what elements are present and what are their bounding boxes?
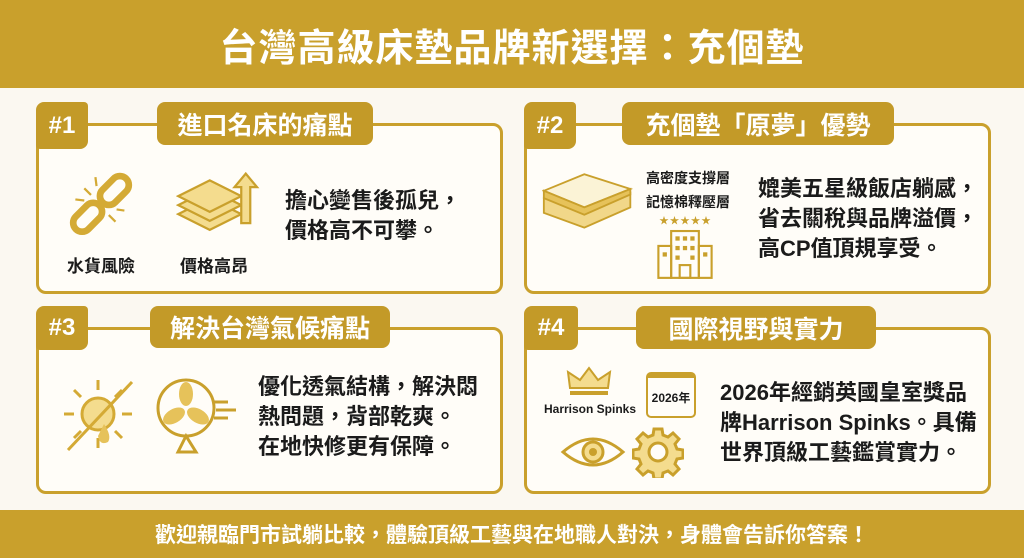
heading 1: 進口名床的痛點 (177, 112, 352, 140)
panel 3 (36, 306, 503, 494)
badge #3: #3 (49, 314, 75, 341)
badge #2 (524, 102, 576, 149)
heading 4 (636, 306, 876, 349)
heading 1 (157, 102, 373, 145)
text 2: 省去關稅與品牌溢價， (758, 206, 978, 231)
panel 2 (524, 102, 991, 294)
labels: layers (646, 170, 730, 210)
icon: fan (156, 378, 236, 454)
badge #4 (524, 306, 578, 350)
footer bar: 歡迎親臨門市試躺比較，體驗頂級工藝與在地職人對決，身體會告訴你答案！ (155, 524, 869, 547)
text 2 (758, 176, 978, 261)
badge #1: #1 (49, 112, 75, 138)
text 4 (720, 380, 977, 465)
title bar: 台灣高級床墊品牌新選擇：充個墊 (219, 28, 804, 70)
text 3: 在地快修更有保障。 (258, 434, 456, 459)
icon: crown with label (544, 366, 636, 416)
heading 4: 國際視野與實力 (668, 316, 844, 344)
text 1: 價格高不可攀。 (285, 218, 439, 243)
text 2: 高CP值頂規享受。 (758, 236, 943, 261)
text 4: 2026年經銷英國皇室獎品 (720, 380, 967, 405)
heading 3: 解決台灣氣候痛點 (170, 315, 370, 343)
icon: eye (560, 438, 626, 466)
icon: broken chain (70, 172, 132, 235)
text 1 (285, 188, 461, 243)
heading 2: 充個墊「原夢」優勢 (645, 112, 870, 140)
footer bar (0, 510, 1024, 558)
label: 價格高昂: 價格高昂 (180, 257, 248, 276)
text 1: 擔心變售後孤兒， (285, 188, 461, 213)
panel 4 (524, 306, 991, 494)
badge #3 (36, 306, 88, 350)
icon: gear (632, 428, 684, 478)
panel 1 (36, 102, 503, 294)
title bar (0, 0, 1024, 88)
heading 3 (150, 306, 390, 348)
labels: layers: 高密度支撐層 (646, 170, 730, 186)
badge #4: #4 (538, 314, 564, 341)
text 3 (258, 374, 478, 459)
icon: calendar 2026: 2026年 (652, 390, 690, 404)
badge #1 (36, 102, 88, 149)
text 3: 熱問題，背部乾爽。 (258, 404, 456, 429)
icon: hotel (657, 214, 713, 279)
icon: sun with drop (64, 380, 133, 451)
text 2: 媲美五星級飯店躺感， (758, 176, 978, 201)
icon: mattress (542, 173, 633, 229)
label: 水貨風險: 水貨風險 (67, 257, 135, 276)
icon: money up (176, 172, 260, 232)
text 4: 世界頂級工藝鑑賞實力。 (720, 440, 962, 465)
icon: crown with label: Harrison Spinks (544, 402, 636, 416)
labels: layers: 記憶棉釋壓層 (646, 194, 730, 210)
heading 2 (622, 102, 894, 145)
text 3: 優化透氣結構，解決悶 (258, 374, 478, 399)
icon: hotel: ★★★★★ (659, 214, 711, 228)
text 4: 牌Harrison Spinks。具備 (720, 410, 977, 435)
badge #2: #2 (537, 112, 563, 138)
icon: calendar 2026 (646, 372, 696, 418)
